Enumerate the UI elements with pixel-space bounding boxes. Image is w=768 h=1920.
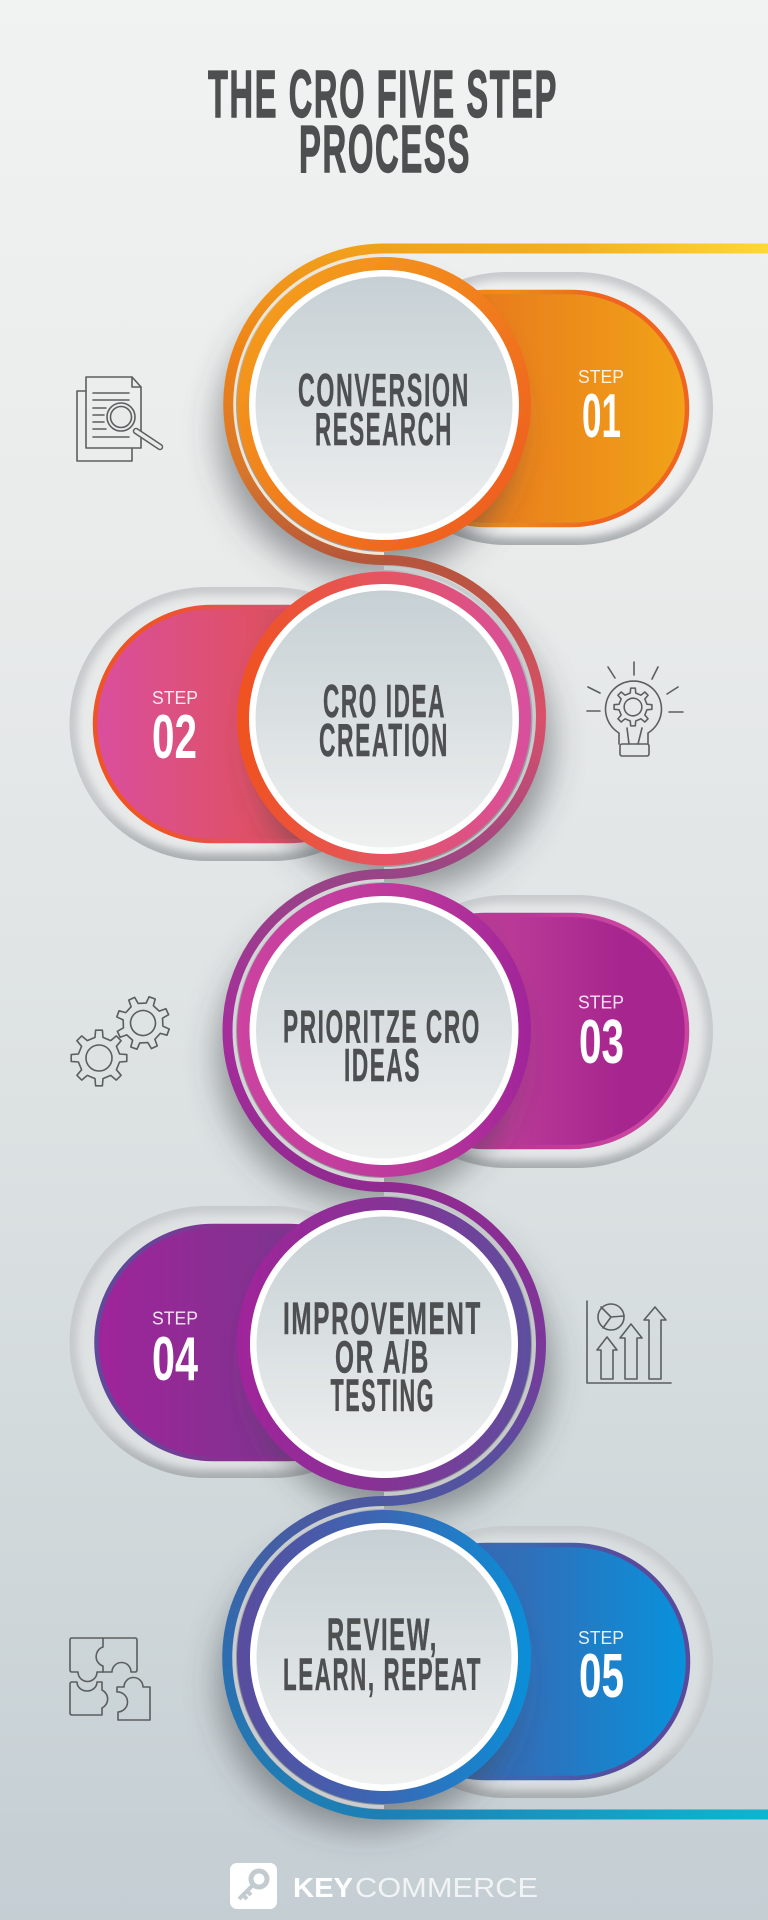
label: prioritze cro ideas: IDEAS xyxy=(344,1039,421,1091)
shadow: step 3 xyxy=(218,907,514,1203)
capsule: step 2 xyxy=(70,587,410,861)
ribbon: around step 2 xyxy=(384,560,541,874)
badge: step 02 xyxy=(152,688,198,772)
logo: key commerce xyxy=(230,1863,538,1909)
wordmark: KEY xyxy=(293,1872,353,1903)
panel: step 2 xyxy=(70,568,552,890)
icon: key badge xyxy=(230,1863,277,1909)
label: prioritze cro ideas xyxy=(283,1000,481,1091)
icon: document with magnifier xyxy=(77,377,160,461)
badge: step 03 xyxy=(578,992,624,1077)
label: conversion research: CONVERSION xyxy=(298,364,470,416)
badge: step 05: STEP xyxy=(578,1628,624,1648)
ring: step 5 xyxy=(234,1507,531,1807)
badge: step 01 xyxy=(578,367,624,451)
panel: step 2: CREATION xyxy=(319,714,449,766)
panel: step 4 xyxy=(70,1194,552,1516)
badge: step 05 xyxy=(578,1628,624,1711)
label: review, learn, repeat xyxy=(283,1609,482,1700)
capsule: step 4 xyxy=(70,1206,410,1478)
wordmark xyxy=(293,1872,538,1903)
badge: step 03: STEP xyxy=(578,992,624,1012)
badge: step 01: STEP xyxy=(578,367,624,387)
ring: step 4 xyxy=(237,1194,534,1494)
icon: gears xyxy=(71,989,177,1086)
shadow: step 1 xyxy=(218,282,514,578)
ribbon: top yellow line xyxy=(383,244,768,254)
badge: step 02: STEP xyxy=(152,688,198,708)
title xyxy=(208,57,558,187)
icon: bar arrows and pie chart xyxy=(587,1301,671,1383)
shadow: step 2 xyxy=(256,594,552,890)
panel: step 5: LEARN, REPEAT xyxy=(283,1649,482,1700)
badge: step 02: 02 xyxy=(152,703,197,772)
label: cro idea creation xyxy=(319,675,449,766)
label: improvement or a/b testing: IMPROVEMENT xyxy=(283,1293,482,1344)
badge: step 01: 01 xyxy=(582,382,621,451)
shadow: step 4 xyxy=(256,1220,552,1516)
ribbon: serpentine connector xyxy=(227,248,768,1814)
capsule: step 3 xyxy=(370,895,713,1168)
ring: step 2 xyxy=(237,568,534,869)
wordmark: COMMERCE xyxy=(355,1872,538,1903)
ribbon: around step 4 xyxy=(384,1187,541,1501)
ribbon: around step 5 xyxy=(227,1501,384,1814)
badge: step 04: 04 xyxy=(152,1325,198,1394)
panel: step 1 xyxy=(218,254,713,578)
ribbon: bottom teal line xyxy=(383,1810,768,1820)
label: conversion research: RESEARCH xyxy=(315,403,453,455)
badge: step 04: STEP xyxy=(152,1308,198,1328)
badge: step 04 xyxy=(152,1308,198,1394)
ring: step 3 xyxy=(234,880,531,1180)
label: improvement or a/b testing: OR A/B xyxy=(335,1332,430,1382)
shadow: step 5 xyxy=(218,1534,514,1830)
label: conversion research xyxy=(298,364,470,455)
panel: step 5 xyxy=(218,1507,713,1830)
icon: light bulb with gear xyxy=(587,662,683,756)
icon: puzzle pieces xyxy=(70,1638,150,1720)
label: improvement or a/b testing xyxy=(283,1293,482,1421)
capsule: step 5 xyxy=(370,1526,713,1798)
badge: step 05: 05 xyxy=(579,1642,624,1711)
label: review, learn, repeat: REVIEW, xyxy=(327,1609,438,1660)
badge: step 03: 03 xyxy=(579,1008,624,1077)
ribbon: around step 3 xyxy=(228,874,384,1187)
title: PROCESS xyxy=(299,112,471,187)
label: cro idea creation: CRO IDEA xyxy=(323,675,446,727)
ribbon: around step 1 xyxy=(228,248,384,560)
panel: step 3: PRIORITZE CRO xyxy=(283,1000,481,1052)
capsule: step 1 xyxy=(370,272,713,545)
ring: step 1 xyxy=(234,254,531,554)
label: improvement or a/b testing: TESTING xyxy=(330,1370,435,1421)
panel: step 3 xyxy=(218,880,713,1203)
